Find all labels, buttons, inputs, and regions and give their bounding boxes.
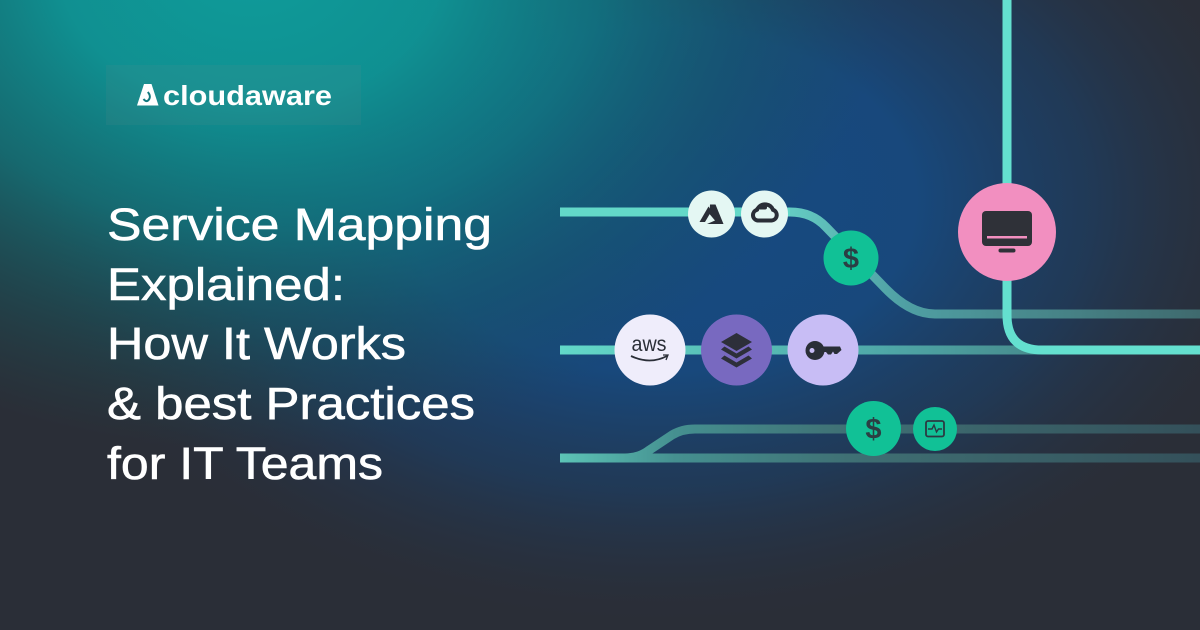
title: Service Mapping bbox=[107, 199, 492, 250]
line: bottom upper route bbox=[560, 429, 1200, 458]
logo panel bbox=[106, 65, 361, 125]
node: aws bbox=[614, 314, 686, 386]
node: activity chart bbox=[913, 407, 957, 451]
node: dollar top bbox=[824, 230, 878, 286]
title bbox=[107, 199, 492, 489]
node: dollar top: $ bbox=[843, 243, 859, 275]
line: middle route bbox=[560, 346, 1200, 354]
node: dollar bottom: $ bbox=[865, 414, 882, 446]
node: google cloud bbox=[741, 190, 788, 238]
title: for IT Teams bbox=[107, 438, 383, 489]
node: dollar bottom bbox=[846, 401, 901, 456]
logo wordmark: cloudaware bbox=[163, 80, 332, 111]
node: key bbox=[788, 314, 858, 386]
title: How It Works bbox=[107, 318, 406, 369]
title: Explained: bbox=[107, 259, 345, 310]
node: aws: aws bbox=[632, 333, 666, 356]
node: layers bbox=[701, 314, 772, 386]
node: azure bbox=[688, 190, 735, 238]
title: & best Practices bbox=[107, 378, 475, 429]
logo mark bbox=[137, 84, 158, 106]
line: vertical route bbox=[1007, 0, 1200, 350]
line: bottom lower route bbox=[625, 454, 1200, 462]
connector lines bbox=[560, 0, 1200, 458]
node: monitor bbox=[958, 183, 1056, 281]
line: top route bbox=[560, 212, 1200, 314]
